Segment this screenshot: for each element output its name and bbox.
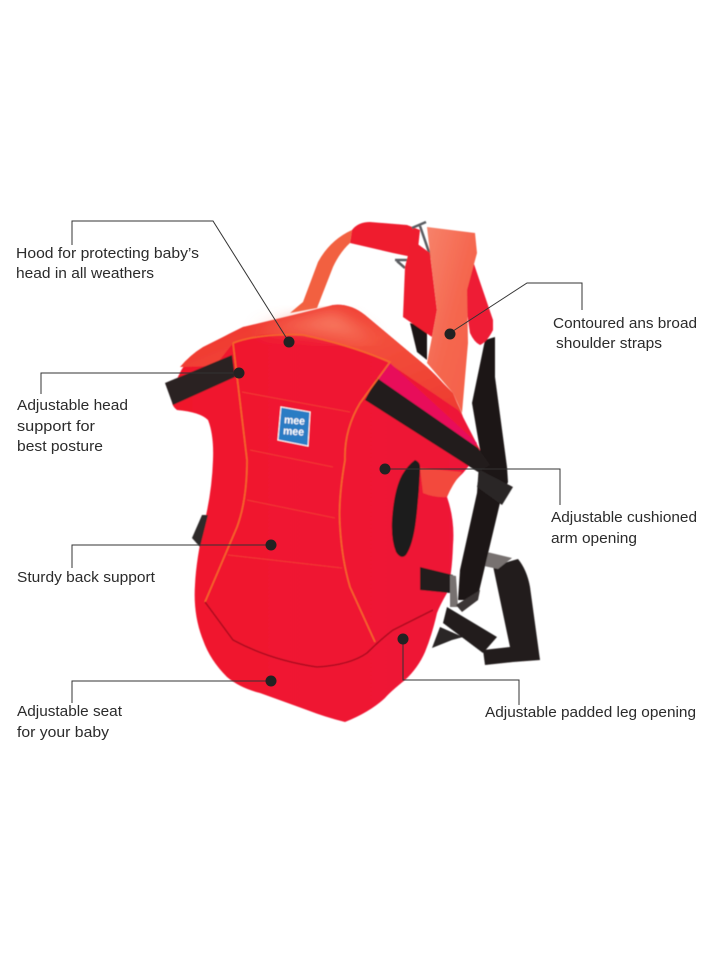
callout: shoulder straps: Contoured ans broad bbox=[553, 316, 697, 332]
callout: arm opening bbox=[380, 464, 697, 547]
rear loop strap bbox=[290, 230, 352, 313]
seat seam bbox=[205, 602, 433, 667]
callout: arm opening: arm opening bbox=[551, 531, 637, 547]
logo bbox=[278, 407, 310, 446]
metal buckle bbox=[395, 222, 431, 268]
left side buckle bbox=[192, 515, 208, 547]
callout: leg opening bbox=[398, 634, 696, 721]
callout: hood bbox=[16, 221, 294, 348]
callout: seat bbox=[17, 676, 276, 741]
right red flap bbox=[464, 258, 493, 345]
black loop strap bbox=[432, 552, 540, 665]
callout: head support: Adjustable head bbox=[17, 398, 128, 414]
callout: leg opening: Adjustable padded leg opening bbox=[485, 705, 696, 721]
lower right buckle and straps bbox=[420, 567, 497, 653]
right cushion roll bbox=[420, 468, 462, 497]
pink hood edge bbox=[377, 363, 477, 449]
callout: hood: Hood for protecting baby’s bbox=[16, 246, 199, 262]
callout: shoulder straps bbox=[444, 283, 697, 352]
diagonal black strap bbox=[365, 378, 490, 472]
red flap bbox=[403, 240, 437, 337]
hood bbox=[180, 305, 463, 417]
logo: mee bbox=[283, 425, 304, 439]
callout: head support: best posture bbox=[17, 439, 103, 455]
callout: seat: Adjustable seat bbox=[17, 704, 122, 720]
callout: hood: head in all weathers bbox=[16, 266, 154, 282]
arm opening bbox=[392, 460, 420, 557]
callout: seat: for your baby bbox=[17, 725, 110, 741]
logo: mee bbox=[284, 414, 305, 428]
callout: head support: support for bbox=[17, 419, 95, 435]
callout: arm opening: Adjustable cushioned bbox=[551, 510, 697, 526]
carrier body bbox=[172, 305, 480, 722]
hood highlight bbox=[255, 312, 375, 340]
strap buckle bbox=[477, 470, 513, 505]
callout: shoulder straps: shoulder straps bbox=[556, 336, 662, 352]
baby carrier illustration bbox=[165, 222, 540, 722]
left head strap bbox=[165, 355, 235, 405]
black strap behind shoulder pad bbox=[410, 323, 427, 360]
callout: head support bbox=[17, 368, 244, 455]
top red strap bbox=[350, 222, 420, 258]
long shoulder strap bbox=[458, 337, 508, 600]
orange seam lines bbox=[205, 335, 390, 642]
callout: back support bbox=[17, 540, 276, 586]
callout: back support: Sturdy back support bbox=[17, 570, 155, 586]
shoulder pad bbox=[427, 227, 477, 413]
